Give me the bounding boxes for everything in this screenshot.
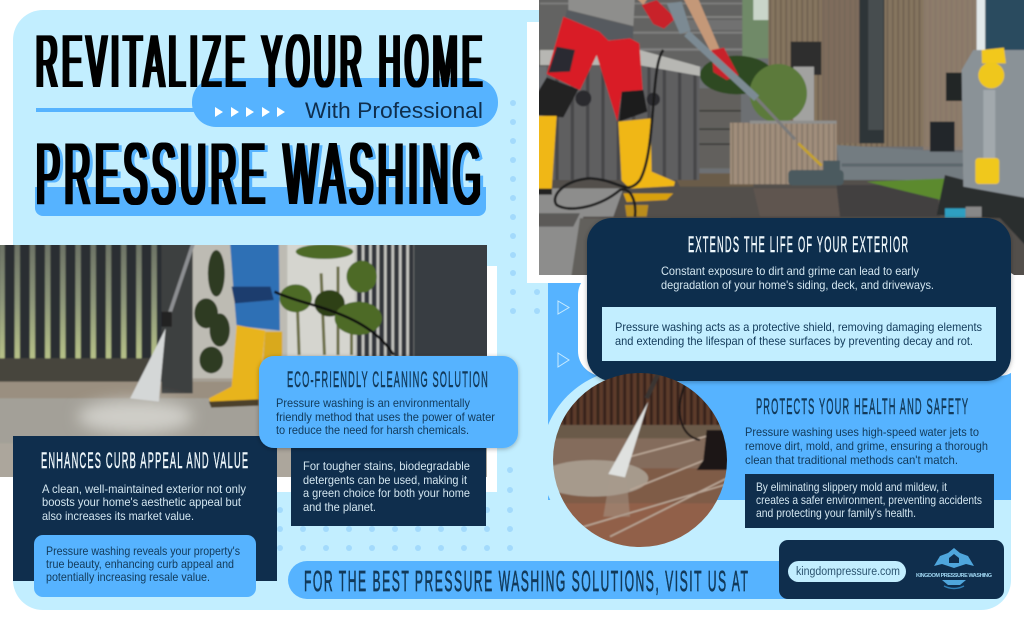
body text: boosts your home's aesthetic appeal but	[42, 495, 242, 509]
logo card	[779, 540, 1004, 599]
subtitle pill	[192, 78, 498, 127]
body text: remove dirt, mold, and grime, ensuring a thorough	[745, 439, 988, 453]
body text	[276, 396, 495, 437]
right margin	[1011, 275, 1024, 621]
panel: eco-friendly cleaning solution	[259, 356, 518, 448]
highlight text	[46, 544, 240, 584]
photo: circular spray on wet pavers	[553, 373, 727, 547]
heading: ECO-FRIENDLY CLEANING SOLUTION	[287, 367, 488, 392]
box background	[291, 440, 486, 526]
icon: company logo	[934, 548, 974, 588]
highlight text	[615, 320, 982, 348]
highlight text: Pressure washing reveals your property's	[46, 544, 240, 558]
body text: also increases its market value.	[42, 509, 194, 523]
body text: For tougher stains, biodegradable	[303, 459, 470, 473]
heading: EXTENDS THE LIFE OF YOUR EXTERIOR	[688, 232, 908, 257]
title line 2 shadow: PRESSURE WASHING	[39, 127, 484, 226]
footer bar	[288, 561, 790, 599]
arrow markers	[215, 107, 285, 117]
body text: Pressure washing is an environmentally	[276, 396, 470, 410]
photo: worker cleaning a patio	[535, 0, 1024, 285]
photo: boots and spray on driveway	[0, 240, 495, 483]
body text: Constant exposure to dirt and grime can lead to early	[661, 264, 919, 278]
card background	[13, 436, 277, 581]
highlight text: true beauty, enhancing curb appeal and	[46, 557, 234, 571]
panel: extends the life of your exterior	[587, 218, 1011, 381]
card background	[779, 540, 1004, 599]
website pill	[788, 561, 906, 582]
highlight text: and extending the lifespan of these surfaces by preventing decay and rot.	[615, 334, 973, 348]
title block	[35, 20, 498, 226]
highlight box	[34, 535, 256, 597]
body text: A clean, well-maintained exterior not only	[42, 482, 246, 496]
circle rim cutout	[541, 369, 723, 551]
dot pattern	[277, 100, 540, 551]
subtitle text: With Professional	[305, 98, 483, 123]
body text	[745, 425, 988, 467]
title underlay bar	[35, 187, 486, 216]
title line 2: PRESSURE WASHING	[36, 125, 481, 224]
heading: ENHANCES CURB APPEAL AND VALUE	[41, 448, 248, 473]
footer text: FOR THE BEST PRESSURE WASHING SOLUTIONS, VISIT US AT	[304, 565, 748, 598]
body text: a green choice for both your home	[303, 486, 470, 500]
panel: eco-friendly lower box	[291, 440, 486, 526]
body text: degradation of your home's siding, deck, and driveways.	[661, 278, 934, 292]
title line 1: REVITALIZE YOUR HOME	[36, 20, 482, 104]
callout text: creates a safer environment, preventing accidents	[756, 493, 982, 507]
panel: protects health and safety background	[548, 283, 1011, 500]
highlight box	[602, 307, 996, 361]
body text	[661, 264, 934, 292]
panel: protects your health and safety text	[745, 394, 994, 528]
callout text: By eliminating slippery mold and mildew, it	[756, 480, 948, 494]
body text: Pressure washing uses high-speed water jets to	[745, 425, 979, 439]
body text: detergents can be used, making it	[303, 473, 468, 487]
heading: PROTECTS YOUR HEALTH AND SAFETY	[756, 394, 968, 419]
card background	[259, 356, 518, 448]
footer call to action	[288, 561, 790, 599]
logo wordmark: KINGDOM PRESSURE WASHING	[916, 573, 992, 579]
body text: to reduce the need for harsh chemicals.	[276, 423, 469, 437]
white frame behind left photo	[13, 266, 497, 492]
body text: clean that traditional methods can't match.	[745, 453, 958, 467]
subtitle rule	[36, 108, 196, 112]
white backing behind exterior card	[578, 270, 1024, 376]
body text: friendly method that uses the power of water	[276, 410, 495, 424]
panel: enhances curb appeal and value	[13, 436, 277, 597]
body text: and the planet.	[303, 500, 376, 514]
website text: kingdompressure.com	[796, 566, 900, 578]
body text	[303, 459, 470, 514]
highlight text: Pressure washing acts as a protective shield, removing damaging elements	[615, 320, 982, 334]
highlight text: potentially increasing resale value.	[46, 570, 210, 584]
panel icons: outlined arrows	[558, 301, 569, 367]
callout text: and protecting your family's health.	[756, 506, 916, 520]
dark callout box	[745, 474, 994, 528]
callout text	[756, 480, 982, 520]
body text	[42, 482, 246, 523]
card background	[587, 218, 1011, 381]
white frame behind top photo	[527, 22, 1024, 283]
